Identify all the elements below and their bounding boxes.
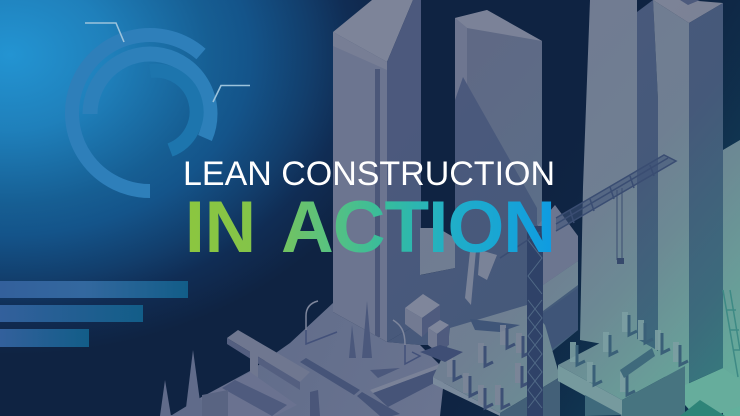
- callout line left: [85, 23, 124, 42]
- title line 2: IN: [185, 187, 256, 268]
- ground platform right: [558, 312, 740, 416]
- stacked bars: [0, 281, 188, 347]
- title line 2: ACTION: [281, 187, 556, 268]
- decorative ring chart: [72, 23, 250, 191]
- crate blocks: [405, 294, 463, 362]
- callout line right: [213, 86, 250, 102]
- middle ring arc: [90, 54, 210, 138]
- ground platform centre: [433, 305, 560, 416]
- tower 2: [455, 10, 542, 285]
- ground platform left: [160, 303, 445, 416]
- isometric city illustration: [160, 0, 740, 416]
- title line 1: LEAN CONSTRUCTION: [183, 155, 555, 193]
- mid base block: [387, 205, 578, 372]
- crane tie on right: [723, 290, 740, 377]
- conifer trees: [160, 301, 400, 416]
- crane mast: [527, 226, 543, 416]
- tower right edge: [723, 140, 740, 416]
- crane cables and hook: [617, 188, 624, 264]
- tower 3: [580, 0, 723, 392]
- inner ring arc: [150, 71, 197, 150]
- tower 1: [333, 0, 421, 342]
- outer ring arc: [72, 35, 201, 191]
- crane jib: [500, 155, 676, 258]
- tower crane: [500, 155, 740, 416]
- lamp posts: [306, 301, 420, 364]
